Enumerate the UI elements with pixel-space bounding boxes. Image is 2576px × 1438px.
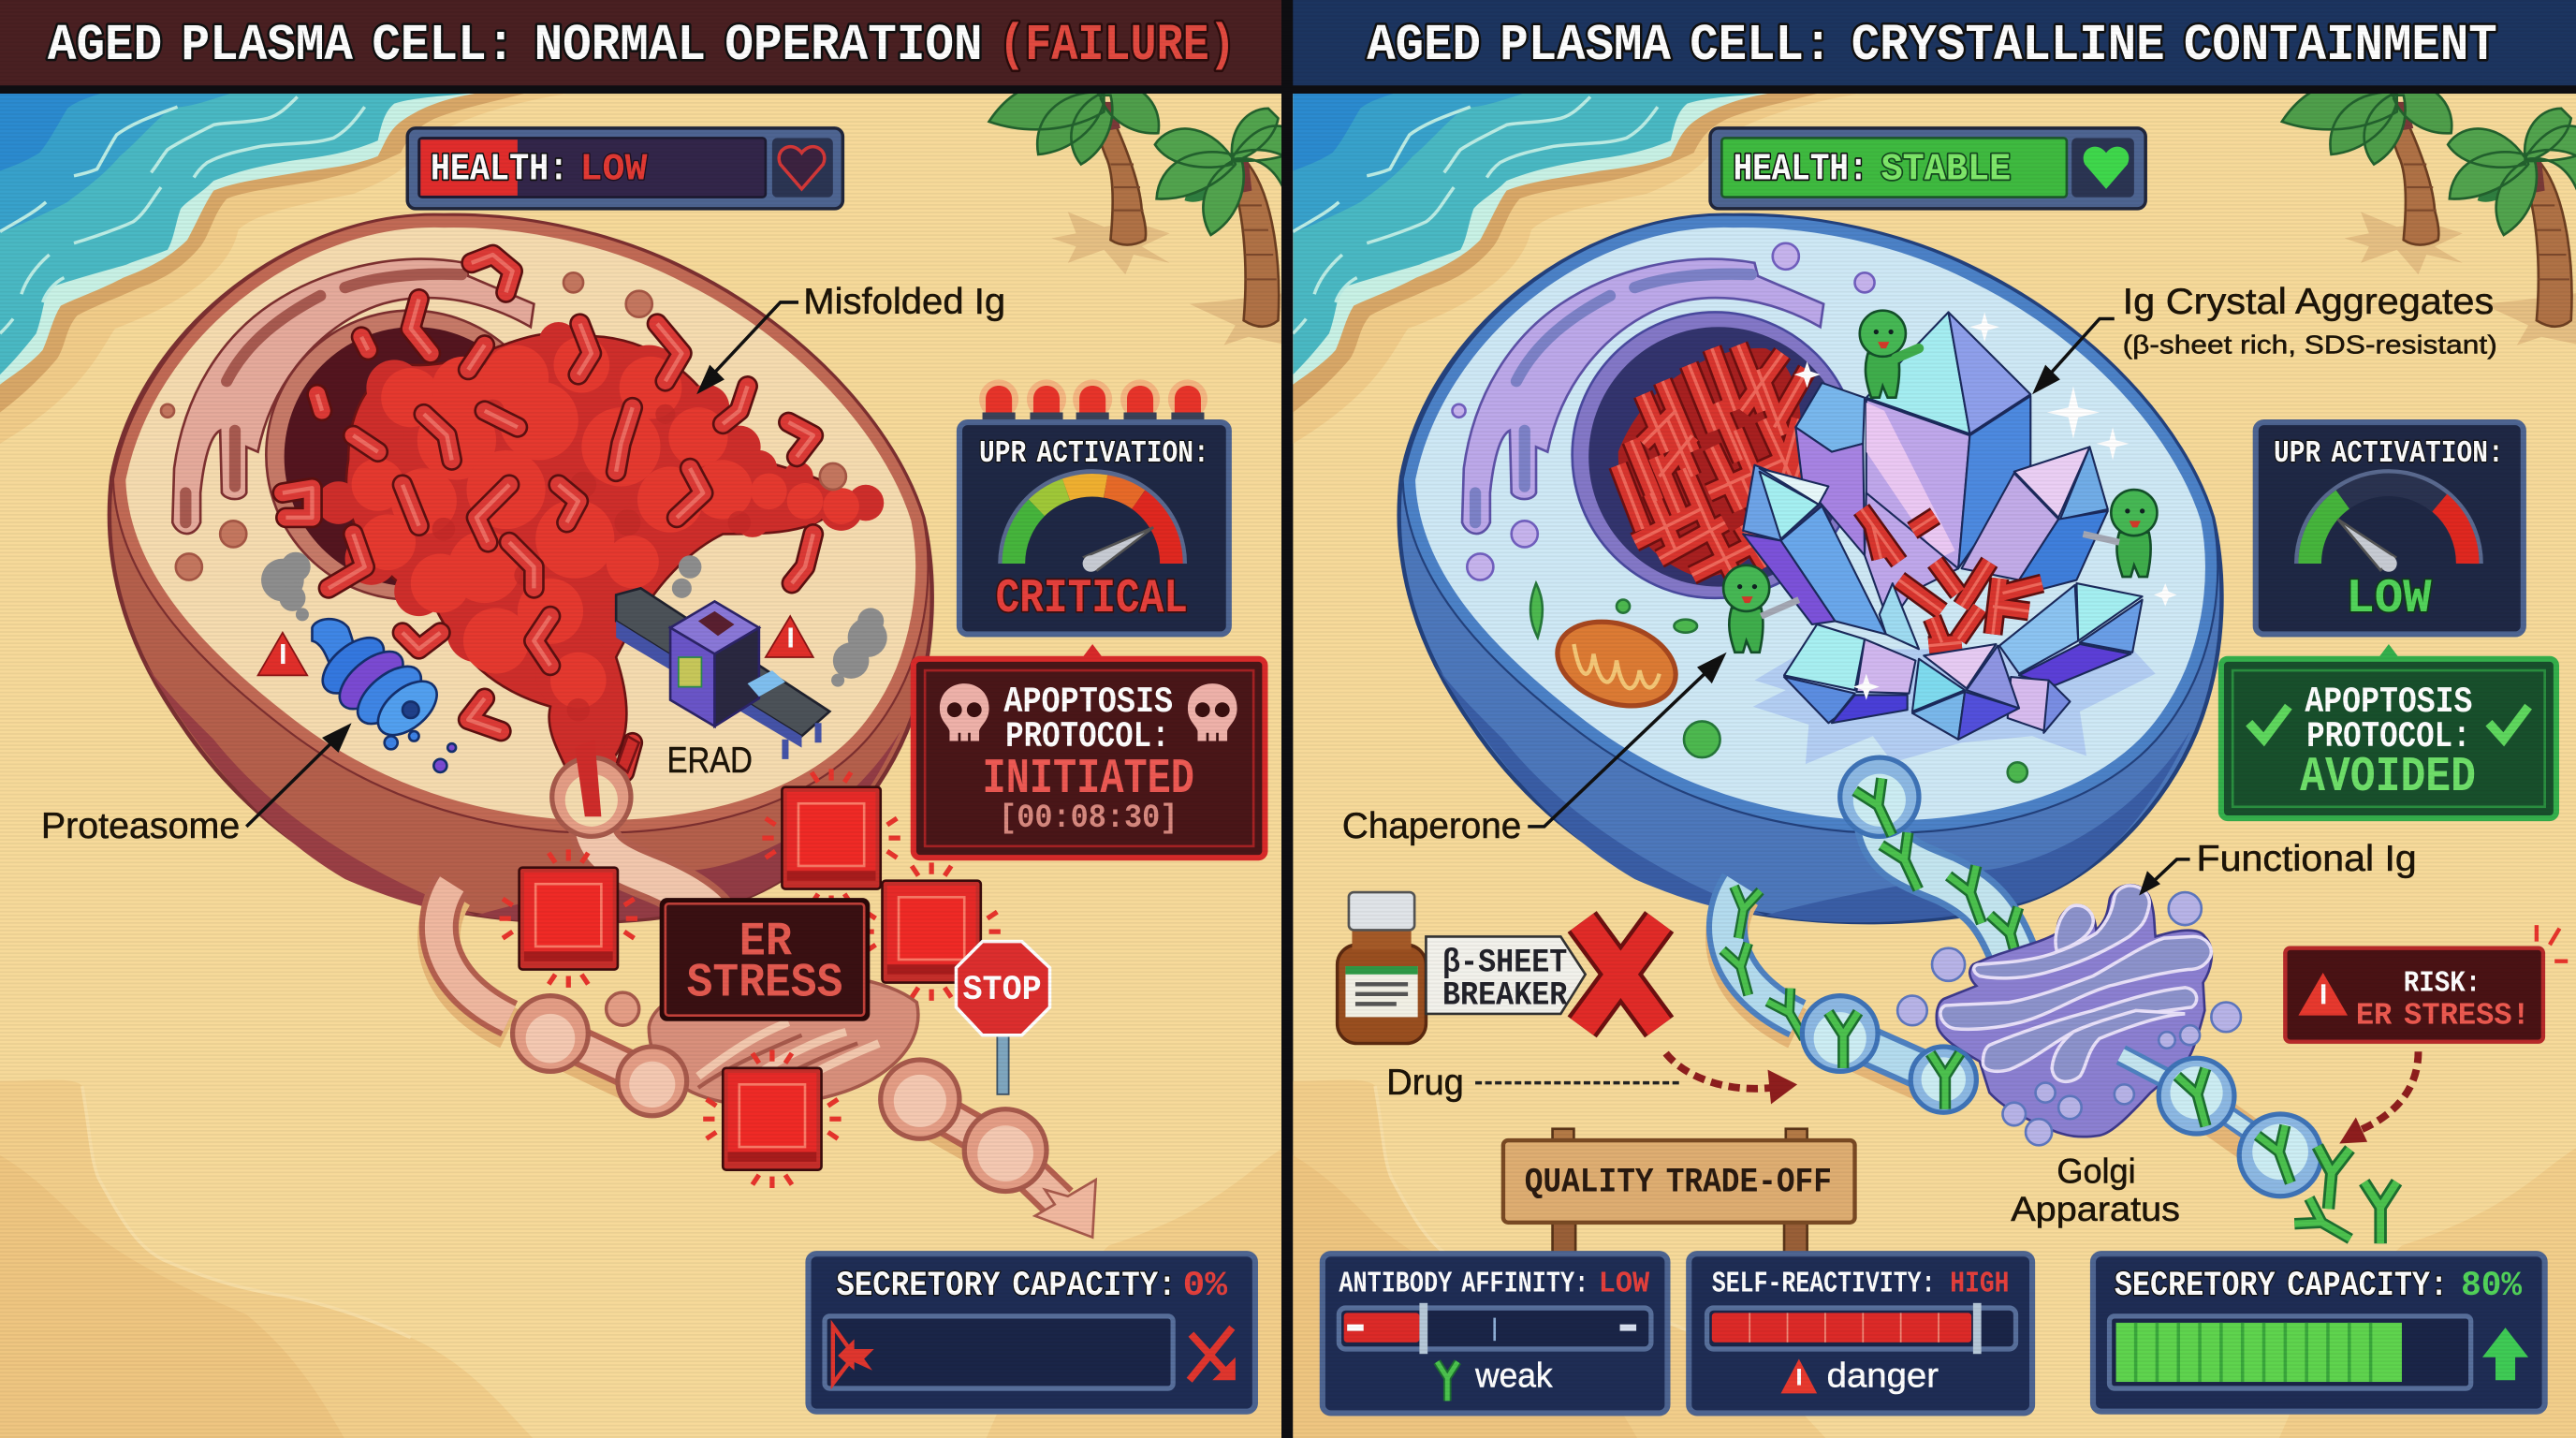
panel: antibody affinity low: ANTIBODY AFFINITY:	[1339, 1269, 1588, 1301]
label: Misfolded Ig: Misfolded Ig	[803, 282, 1005, 322]
label: beta-sheet breaker banner	[1426, 936, 1586, 1014]
panel: secretory capacity 0%	[809, 1254, 1255, 1412]
panel: secretory capacity 80%: SECRETORY CAPACITY:	[2115, 1267, 2448, 1306]
panel: UPR activation critical	[959, 379, 1229, 634]
panel: apoptosis protocol avoided	[2221, 644, 2556, 818]
title bar: right	[1293, 0, 2576, 85]
ER exit tube and antibodies: right	[1722, 757, 2280, 1162]
title bar: left: (FAILURE)	[999, 18, 1236, 75]
panel: self-reactivity high: SELF-REACTIVITY:	[1712, 1269, 1936, 1301]
nucleus with ordered rods	[1573, 312, 1858, 598]
icon: mitochondrion	[1546, 608, 1687, 720]
icon: ERAD conveyor machine	[616, 588, 829, 759]
icon: smoke puffs	[261, 552, 887, 687]
sparkles	[1794, 312, 2177, 700]
icon: skull left	[940, 683, 989, 741]
crystal cluster	[1743, 312, 2108, 649]
label: ERAD: ERAD	[667, 741, 753, 781]
label: Functional Ig	[2139, 839, 2417, 896]
sign: ER STRESS: STRESS	[687, 958, 842, 1011]
label: Golgi Apparatus: Apparatus	[2011, 1190, 2180, 1228]
icon: chaperone left	[1723, 565, 1799, 653]
sign: STOP	[956, 942, 1050, 1094]
beach background: right	[1293, 79, 2576, 1438]
panel: UPR activation low	[2256, 422, 2524, 634]
label: Golgi Apparatus: Golgi	[2056, 1152, 2136, 1191]
title bar: left: AGED PLASMA CELL: NORMAL OPERATION	[48, 18, 983, 75]
icon: proteasome	[312, 619, 456, 772]
panel: apoptosis protocol avoided: PROTOCOL:	[2306, 716, 2471, 757]
alarm lights	[979, 379, 1208, 422]
title bar: right: AGED PLASMA CELL: CRYSTALLINE CONTAINMENT	[1367, 18, 2497, 75]
panel: secretory capacity 80%	[2093, 1254, 2545, 1412]
panel: normal operation (failure)	[0, 0, 1288, 1438]
cell: protected plasma cell	[1323, 215, 2568, 1413]
panel: UPR activation critical: UPR ACTIVATION:	[979, 436, 1209, 472]
health bar: stable	[1710, 128, 2145, 209]
icon: chaperone right	[2083, 490, 2157, 577]
panel: UPR activation low: LOW	[2346, 573, 2432, 626]
nucleus	[266, 311, 555, 600]
icon: check right	[2489, 707, 2528, 740]
organelle dots: right	[1453, 243, 2027, 782]
panel: antibody affinity low: LOW	[1599, 1269, 1649, 1301]
panel: apoptosis protocol avoided: APOPTOSIS	[2305, 682, 2472, 723]
panel: apoptosis protocol initiated	[914, 644, 1265, 858]
label: beta-sheet breaker banner: β-SHEET	[1442, 944, 1567, 981]
callout: risk ER stress: RISK:	[2404, 967, 2481, 1000]
crystal aggregate halo	[1753, 649, 2156, 764]
label: Chaperone	[1342, 653, 1727, 846]
panel: apoptosis protocol initiated: PROTOCOL:	[1005, 716, 1170, 757]
icon: secreted antibodies	[2294, 1146, 2397, 1252]
icon: ER blocked red squares	[500, 769, 1001, 1188]
panel: secretory capacity 80%: 80%	[2461, 1267, 2523, 1306]
label: Proteasome: Proteasome	[41, 806, 240, 846]
trapped red rods in crystal	[1862, 509, 2042, 646]
health bar: low: LOW	[580, 148, 648, 191]
icon: danger triangle	[1781, 1358, 1817, 1393]
icon: up arrow	[2482, 1328, 2528, 1380]
panel: apoptosis protocol initiated: INITIATED	[983, 751, 1194, 807]
label: beta-sheet breaker banner: BREAKER	[1442, 976, 1568, 1014]
callout: risk ER stress	[2285, 925, 2568, 1042]
label: Chaperone: Chaperone	[1342, 806, 1521, 846]
panel: apoptosis protocol avoided: AVOIDED	[2300, 749, 2476, 805]
arrow: risk dashed curve	[2339, 1051, 2419, 1144]
secretory vesicles leaving Golgi	[1910, 1047, 2321, 1196]
gauge: low	[2297, 472, 2481, 572]
icon: skull right	[1188, 683, 1237, 741]
small organelle dots	[161, 272, 846, 580]
arrow: drug dashed curve	[1666, 1053, 1797, 1104]
crystal cluster front	[1784, 583, 2143, 740]
Golgi apparatus	[1897, 885, 2241, 1145]
panel: self-reactivity high: danger	[1827, 1356, 1939, 1394]
panel: self-reactivity high: HIGH	[1950, 1269, 2009, 1301]
icon: blocked arrow	[833, 1326, 874, 1384]
ER exit tube and Golgi: left	[439, 736, 1096, 1238]
sign: STOP: STOP	[962, 971, 1042, 1010]
icon: weak antibody	[1437, 1362, 1457, 1401]
sign: quality trade-off: QUALITY TRADE-OFF	[1525, 1163, 1832, 1202]
label: Ig Crystal Aggregates	[2032, 282, 2497, 394]
panel: UPR activation low: UPR ACTIVATION:	[2274, 436, 2504, 472]
title bar: left	[0, 0, 1281, 85]
icon: warning triangle left	[258, 633, 307, 675]
health bar: low: HEALTH:	[431, 148, 568, 191]
icon: drug bottle	[1338, 892, 1426, 1043]
health bar: stable: HEALTH:	[1734, 148, 1868, 191]
beach background: left	[0, 79, 1288, 1438]
icon: red X on drug	[1582, 922, 1660, 1027]
sign: ER STRESS	[662, 901, 868, 1019]
panel: antibody affinity low	[1323, 1254, 1667, 1413]
panel: secretory capacity 0%: SECRETORY CAPACITY:	[836, 1267, 1177, 1306]
panel: apoptosis protocol initiated: APOPTOSIS	[1003, 682, 1173, 723]
icon: warning triangle right	[766, 616, 813, 657]
label: Ig Crystal Aggregates: Ig Crystal Aggregates	[2123, 282, 2494, 322]
panel: secretory capacity 0%: 0%	[1183, 1267, 1228, 1306]
label: Misfolded Ig	[696, 282, 1005, 394]
label: Proteasome	[41, 723, 352, 846]
health bar: low	[407, 128, 842, 209]
gauge: critical	[1001, 472, 1184, 572]
panel: antibody affinity low: weak	[1474, 1356, 1553, 1394]
sign: quality trade-off	[1503, 1129, 1855, 1254]
panel: UPR activation critical: CRITICAL	[996, 573, 1188, 626]
label: Golgi Apparatus	[2011, 1152, 2180, 1228]
endoplasmic reticulum: right	[1462, 259, 1823, 534]
label: Ig Crystal Aggregates: (β-sheet rich, SDS-resistant)	[2123, 330, 2497, 359]
icon: check left	[2249, 707, 2289, 740]
cell: failing plasma cell	[41, 215, 1096, 1238]
icon: blocked cross	[1190, 1328, 1236, 1380]
callout: risk ER stress: ER STRESS!	[2356, 998, 2530, 1034]
icon: chaperone top	[1860, 311, 1919, 398]
panel: self-reactivity high	[1689, 1254, 2032, 1413]
label: Functional Ig: Functional Ig	[2197, 839, 2417, 879]
health bar: stable: STABLE	[1881, 148, 2011, 191]
panel: apoptosis protocol initiated: [00:08:30]	[999, 800, 1178, 837]
sign: ER STRESS: ER	[739, 917, 792, 970]
misfolded protein aggregate	[283, 255, 884, 814]
endoplasmic reticulum	[172, 259, 534, 534]
label: Drug: Drug	[1386, 1063, 1464, 1103]
